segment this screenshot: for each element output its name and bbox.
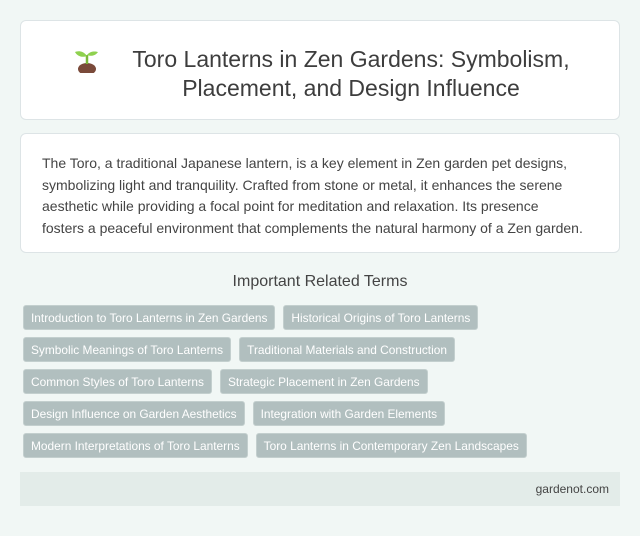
tag list: Introduction to Toro Lanterns in Zen Gardens xyxy=(31,311,267,325)
tag list: Common Styles of Toro Lanterns xyxy=(31,375,204,389)
header card xyxy=(20,20,620,120)
footer: gardenot.com xyxy=(536,482,609,496)
tag list: Symbolic Meanings of Toro Lanterns xyxy=(31,343,223,357)
tag list: Design Influence on Garden Aesthetics xyxy=(31,407,237,421)
tag list: Modern Interpretations of Toro Lanterns xyxy=(31,439,240,453)
tag list: Strategic Placement in Zen Gardens xyxy=(228,375,420,389)
tag list: Traditional Materials and Construction xyxy=(247,343,447,357)
tag list: Historical Origins of Toro Lanterns xyxy=(291,311,470,325)
icon: seedling xyxy=(75,51,98,73)
tag list xyxy=(23,305,527,458)
description card: The Toro, a traditional Japanese lantern, is a key element in Zen garden pet designs, xyxy=(42,155,567,171)
tag list: Integration with Garden Elements xyxy=(261,407,437,421)
description card: aesthetic while providing a focal point for meditation and relaxation. Its presence xyxy=(42,198,539,214)
title: Toro Lanterns in Zen Gardens: Symbolism, Placement, and Design Influence xyxy=(132,46,570,101)
section heading: Important Related Terms xyxy=(233,273,407,290)
description card: symbolizing light and tranquility. Crafted from stone or metal, it enhances the serene xyxy=(42,176,562,192)
tag list: Toro Lanterns in Contemporary Zen Landscapes xyxy=(264,439,519,453)
description card xyxy=(20,133,620,253)
footer xyxy=(20,472,620,506)
description card: fosters a peaceful environment that complements the natural harmony of a Zen garden. xyxy=(42,220,583,236)
